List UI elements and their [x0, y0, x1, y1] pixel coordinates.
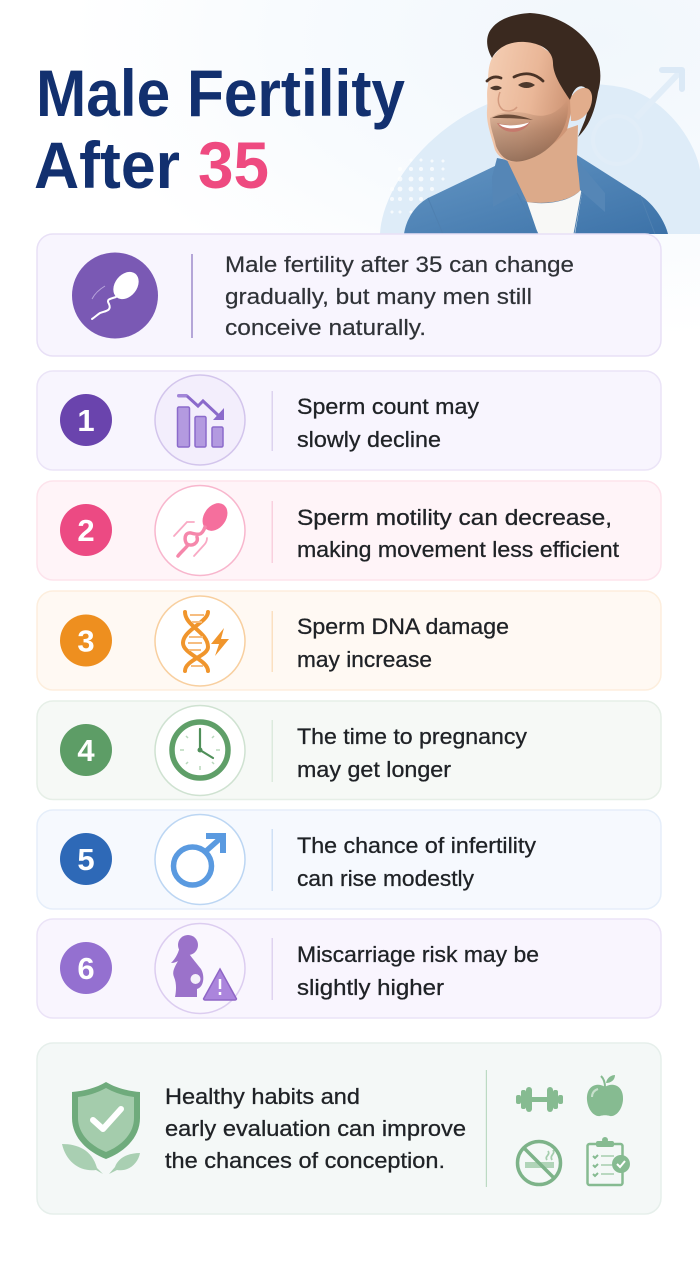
text: Healthy habits and: [165, 1084, 360, 1109]
divider: [486, 1070, 487, 1187]
text: may get longer: [297, 757, 452, 782]
icon: checklist clipboard: [588, 1137, 630, 1185]
text: Sperm motility can decrease,: [297, 505, 612, 530]
faint male symbol: [593, 70, 682, 164]
title: 35: [198, 128, 269, 202]
icon: sperm: [72, 252, 158, 338]
hero blob: [380, 84, 700, 234]
number badge 1: 1: [77, 403, 95, 438]
icon: shield with leaves: [62, 1082, 140, 1174]
text: [297, 505, 620, 562]
intro text: gradually, but many men still: [225, 284, 532, 309]
number badge 1: [60, 394, 112, 446]
divider: [272, 720, 273, 782]
text: Miscarriage risk may be: [297, 942, 539, 967]
divider: [191, 254, 193, 338]
icon: clock: [155, 706, 245, 796]
text: Sperm DNA damage: [297, 614, 509, 639]
number badge 3: 3: [77, 624, 95, 658]
text: Sperm count may: [297, 394, 480, 419]
halftone dots: [390, 158, 444, 214]
text: [297, 724, 528, 782]
divider: [272, 938, 273, 1000]
face: [487, 38, 574, 162]
icon: declining bar chart: [155, 375, 245, 465]
man portrait: [404, 13, 668, 234]
eyes: [490, 82, 535, 90]
number badge 2: 2: [77, 513, 95, 548]
icon: DNA damage: [155, 596, 245, 686]
title: [34, 56, 405, 202]
number badge 6: 6: [77, 951, 95, 986]
denim shirt: [404, 155, 668, 234]
panel: healthy habits: [37, 1043, 661, 1214]
mustache and mouth: [492, 114, 533, 120]
shirt seams: [428, 190, 655, 234]
icon: male symbol: [155, 814, 245, 904]
number badge 2: [60, 504, 112, 556]
panel: item 4: [37, 701, 661, 800]
divider: [272, 829, 273, 891]
ear: [570, 88, 592, 121]
header background wash: [0, 0, 700, 400]
intro text: Male fertility after 35 can change: [225, 252, 574, 277]
shirt collar: [492, 156, 605, 212]
number badge 3: [60, 614, 112, 666]
text: [297, 394, 480, 452]
text: slowly decline: [297, 427, 441, 452]
number badge 6: [60, 942, 112, 994]
neck: [505, 125, 583, 203]
panel: item 3: [37, 591, 661, 690]
intro text: conceive naturally.: [225, 315, 426, 340]
panel: item 1: [37, 371, 661, 470]
panel: item 5: [37, 810, 661, 909]
panel: item 6: [37, 919, 661, 1018]
t-shirt: [527, 187, 583, 234]
text: The chance of infertility: [297, 833, 537, 858]
text: [165, 1084, 466, 1173]
text: making movement less efficient: [297, 537, 620, 562]
title: Male Fertility: [36, 56, 405, 130]
panel: intro: [37, 234, 661, 356]
hair: [487, 13, 600, 137]
divider: [272, 391, 273, 451]
title: After: [34, 128, 180, 202]
text: can rise modestly: [297, 866, 475, 891]
number badge 5: 5: [77, 842, 95, 877]
icon: apple: [587, 1075, 623, 1116]
intro text: [225, 252, 574, 340]
text: may increase: [297, 647, 432, 672]
text: [297, 833, 537, 891]
icon: slowed sperm: [155, 486, 245, 576]
eyebrows: [487, 74, 543, 81]
number badge 5: [60, 833, 112, 885]
number badge 4: 4: [77, 733, 95, 768]
icon: dumbbell: [516, 1087, 563, 1112]
beard: [490, 100, 568, 162]
divider: [272, 501, 273, 563]
text: [297, 942, 539, 1000]
panel: item 2: [37, 481, 661, 580]
icon: no smoking: [518, 1142, 560, 1184]
text: the chances of conception.: [165, 1148, 445, 1173]
text: The time to pregnancy: [297, 724, 528, 749]
icon: pregnancy warning: [155, 924, 245, 1014]
text: early evaluation can improve: [165, 1116, 466, 1141]
text: [297, 614, 509, 672]
nose: [498, 92, 517, 111]
text: slightly higher: [297, 975, 445, 1000]
number badge 4: [60, 724, 112, 776]
divider: [272, 611, 273, 672]
